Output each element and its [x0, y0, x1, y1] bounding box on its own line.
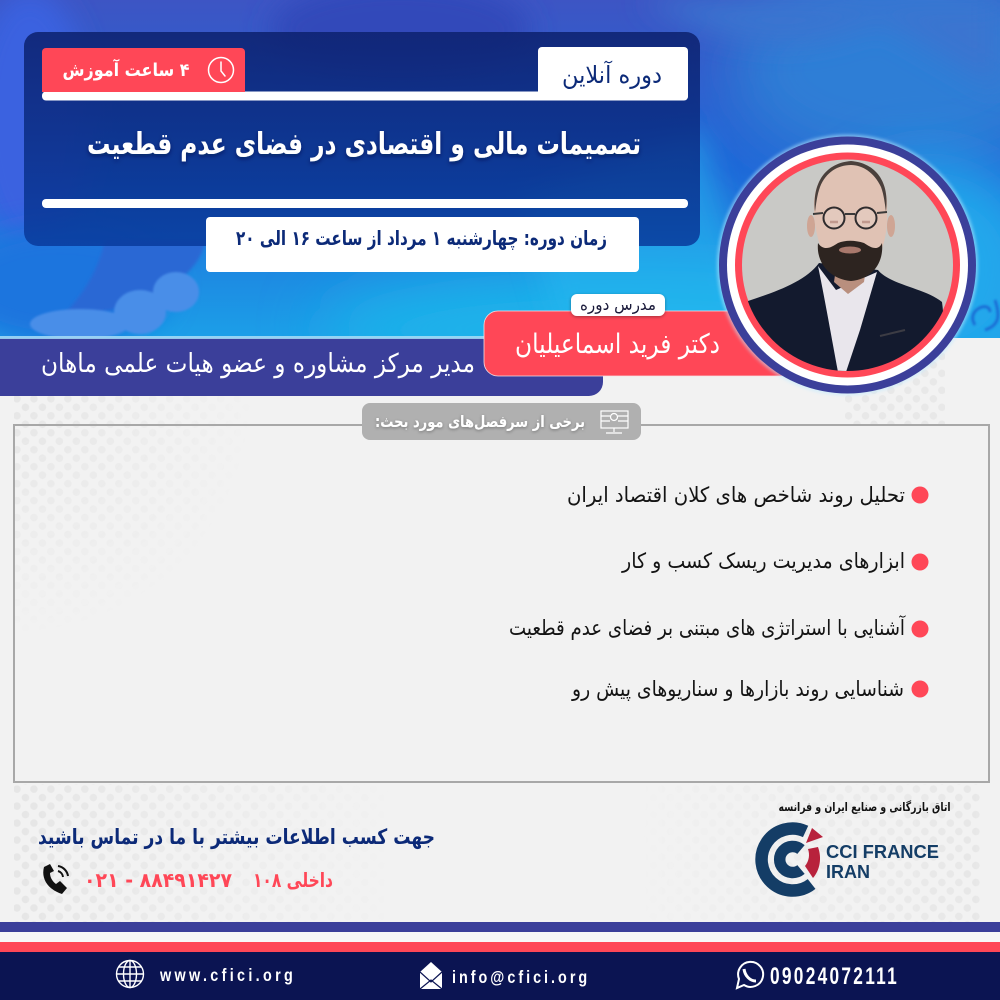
instructor role band: [0, 336, 603, 396]
contact prompt: جهت کسب اطلاعات بیشتر با ما در تماس باشید: [38, 825, 435, 849]
course title: تصمیمات مالی و اقتصادی در فضای عدم قطعیت: [87, 127, 641, 162]
halftone dot texture: [14, 340, 980, 922]
topics heading pill: [362, 403, 641, 440]
whatsapp number: 09024072111: [770, 963, 897, 990]
phone contact: ۰۲۱ - ۸۸۴۹۱۴۲۷: [84, 868, 232, 892]
tab: online course: [538, 47, 688, 100]
topic 2: ابزارهای مدیریت ریسک کسب و کار: [621, 549, 905, 573]
topic 4: شناسایی روند بازارها و سناریوهای پیش رو: [571, 677, 904, 701]
instructor label badge: مدرس دوره: [580, 295, 656, 315]
icon: mail: [420, 962, 442, 989]
portrait figure: [748, 161, 943, 371]
icon: phone: [43, 864, 68, 894]
topic list: [509, 483, 928, 701]
blurred glyphs: [973, 300, 998, 330]
logo: CCI France Iran: [762, 828, 939, 891]
icon: presentation screen: [601, 411, 628, 433]
outline: topics panel: [14, 425, 989, 782]
tab: training hours: [42, 48, 245, 92]
phone contact: داخلی ۱۰۸: [253, 868, 333, 892]
tab: training hours: ۴ ساعت آموزش: [62, 58, 190, 81]
header photo background: [0, 0, 1000, 338]
icon: clock: [208, 58, 234, 82]
instructor name plate: دکتر فرید اسماعیلیان: [515, 329, 720, 360]
course time box: زمان دوره: چهارشنبه ۱ مرداد از ساعت ۱۶ الی ۲۰: [236, 226, 607, 251]
website: www.cfici.org: [159, 966, 293, 985]
topic 3: آشنایی با استراتژی های مبتنی بر فضای عدم قطعیت: [509, 615, 906, 640]
blurred arm: [70, 246, 204, 310]
topics heading pill: برخی از سرفصل‌های مورد بحث:: [375, 412, 585, 431]
icon: globe: [116, 960, 144, 988]
icon: whatsapp: [737, 962, 763, 988]
instructor role band: مدیر مرکز مشاوره و عضو هیات علمی ماهان: [41, 349, 475, 379]
tab: online course: دوره آنلاین: [562, 60, 662, 89]
logo: CCI France Iran: CCI FRANCE: [826, 842, 939, 862]
footer bar: [0, 952, 1000, 1000]
instructor portrait: [717, 134, 978, 396]
blurred hand: [30, 272, 199, 339]
bottom white rule: [42, 199, 688, 208]
blurred paper: [545, 127, 732, 291]
instructor name plate: [484, 311, 790, 376]
phone contact: [43, 864, 333, 894]
email: info@cfici.org: [452, 968, 587, 987]
top white rule: [42, 92, 688, 100]
logo: CCI France Iran: IRAN: [826, 862, 870, 882]
topic 1: تحلیل روند شاخص های کلان اقتصاد ایران: [567, 483, 905, 507]
course info panel: [24, 32, 700, 246]
tricolor stripes: [0, 922, 1000, 952]
logo caption: اتاق بازرگانی و صنایع ایران و فرانسه: [778, 800, 950, 815]
course time box: [206, 217, 639, 272]
portrait rings: [717, 134, 978, 396]
